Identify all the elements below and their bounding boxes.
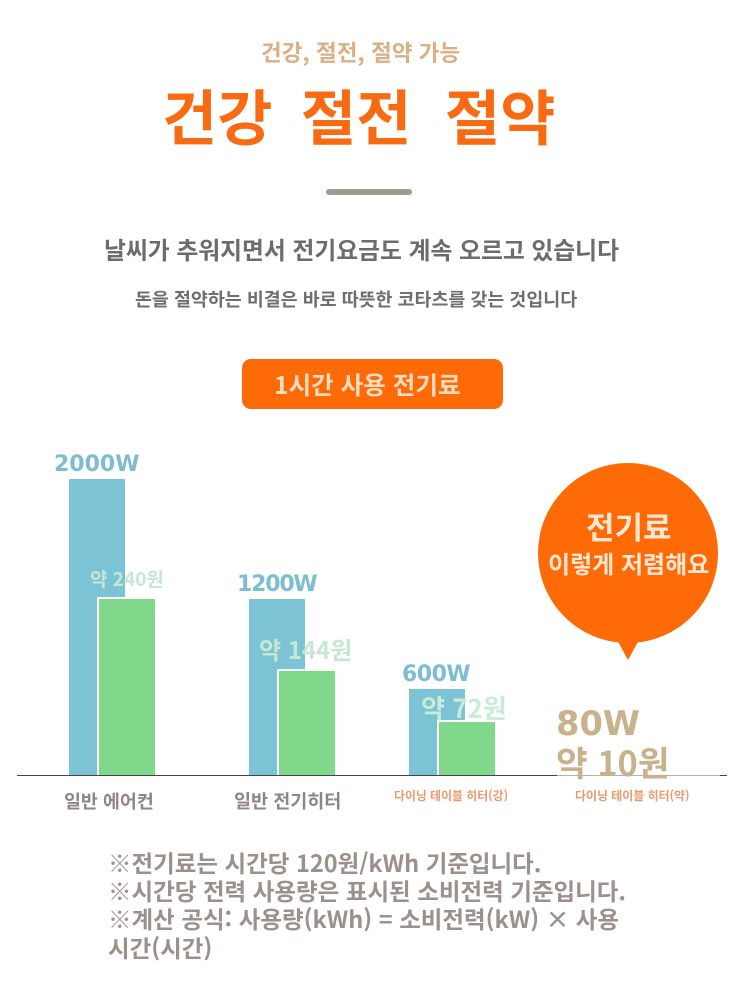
cost label: 약 72원	[421, 689, 507, 726]
category label: table heater low: 다이닝 테이블 히터(약)	[575, 787, 690, 804]
bubble shape	[538, 463, 718, 660]
low setting values	[556, 704, 670, 786]
power bar 600W	[409, 689, 465, 775]
speech bubble	[538, 463, 718, 660]
note 3: ※계산 공식: 사용량(kWh) = 소비전력(kW) × 사용	[108, 901, 619, 935]
note 3 continued: 시간(시간)	[108, 930, 212, 964]
headline: 날씨가 추워지면서 전기요금도 계속 오르고 있습니다	[104, 231, 619, 266]
sub headline: 돈을 절약하는 비결은 바로 따뜻한 코타츠를 갖는 것입니다	[135, 286, 577, 312]
footnotes	[108, 845, 626, 964]
cost bar 144 won	[277, 669, 335, 775]
bubble heading: 전기료	[586, 503, 672, 548]
cost label: 약 144원	[259, 631, 352, 666]
power bar 1200W	[249, 599, 305, 775]
power label: 600W	[402, 662, 470, 687]
cost bar 72 won	[437, 720, 495, 775]
divider bar	[326, 189, 412, 195]
power label: 1200W	[237, 572, 316, 597]
title word: power saving: 절전	[301, 71, 411, 158]
category label: electric heater: 일반 전기히터	[234, 788, 341, 814]
power bar 2000W	[69, 479, 125, 775]
badge label: 1시간 사용 전기료	[274, 366, 461, 402]
power label: 2000W	[54, 452, 140, 477]
category label: air conditioner: 일반 에어컨	[64, 788, 154, 814]
title	[162, 71, 555, 158]
bar group: electric heater	[237, 572, 352, 775]
power label: 80W	[556, 704, 640, 743]
bar group: dining table heater high	[402, 662, 507, 775]
subtitle: 건강, 절전, 절약 가능	[261, 36, 460, 68]
note 1: ※전기료는 시간당 120원/kWh 기준입니다.	[108, 845, 541, 879]
bubble text: 이렇게 저렴해요	[548, 545, 709, 580]
axis line	[17, 775, 727, 776]
note 2: ※시간당 전력 사용량은 표시된 소비전력 기준입니다.	[108, 873, 626, 907]
title word: health: 건강	[162, 71, 272, 158]
cost bar 240 won	[97, 597, 155, 775]
title word: savings: 절약	[445, 71, 555, 158]
bar group: air conditioner	[54, 452, 164, 775]
category label: table heater high: 다이닝 테이블 히터(강)	[394, 787, 508, 804]
cost label: 약 240원	[90, 565, 164, 592]
cost label: 약 10원	[556, 736, 670, 786]
section badge: hourly electricity cost	[242, 359, 503, 409]
